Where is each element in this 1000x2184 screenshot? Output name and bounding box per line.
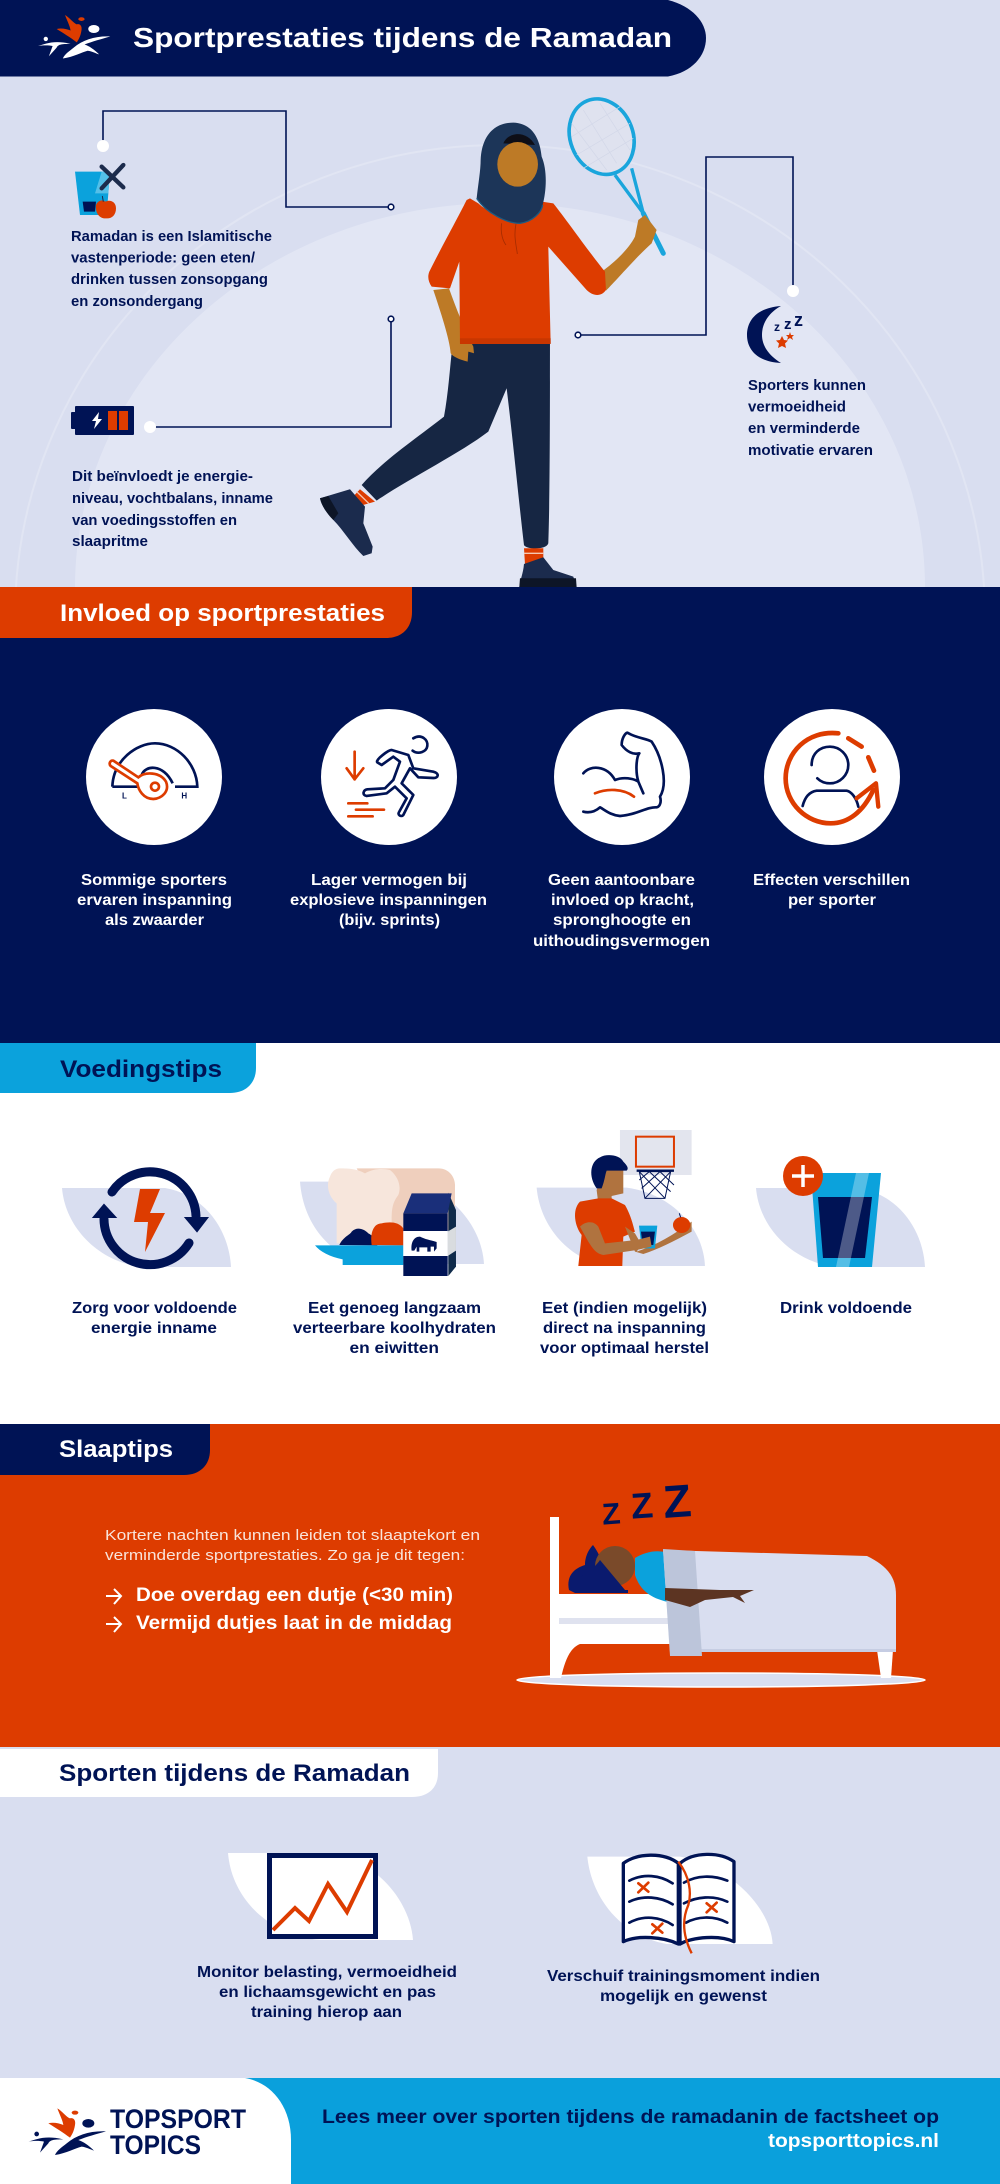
- hoodie: [428, 198, 606, 343]
- text: fatigue explanation: Sporters kunnen: [748, 378, 866, 394]
- icon: low battery: [71, 406, 134, 435]
- heading: main title: Sportprestaties tijdens de Ramadan: [133, 22, 672, 53]
- text: energy explanation: [72, 469, 273, 550]
- text: fatigue explanation: en verminderde: [748, 421, 860, 437]
- headscarf: [477, 123, 546, 223]
- connector: fatigue to figure: [575, 157, 799, 338]
- icon: sleeping letters: Z: [630, 1484, 654, 1527]
- face: [497, 142, 538, 187]
- text: energy explanation: niveau, vochtbalans, inname: [72, 491, 273, 507]
- text: sufficient energy: Zorg voor voldoende: [72, 1300, 237, 1317]
- icon: moon and sleep: z: [794, 310, 803, 330]
- text: no effect on strength: invloed op kracht,: [551, 892, 694, 909]
- list: sleep tips: Doe overdag een dutje (<30 min): [136, 1585, 453, 1606]
- heading tab: Voedingstips: Voedingstips: [60, 1056, 222, 1083]
- text: no effect on strength: Geen aantoonbare: [548, 872, 695, 889]
- icon: player with basketball hoop, drink and apple: [537, 1130, 705, 1266]
- icon: sleeping letters: Z: [661, 1474, 693, 1528]
- text: sufficient energy: [72, 1300, 237, 1337]
- text: energy explanation: Dit beïnvloedt je energie-: [72, 469, 253, 485]
- text: monitoring: [197, 1964, 457, 2021]
- text: shift training: mogelijk en gewenst: [600, 1988, 767, 2005]
- text: shift training: [547, 1968, 820, 2005]
- text: monitoring: training hierop aan: [251, 2004, 402, 2021]
- text: effort: Sommige sporters: [81, 872, 227, 889]
- text: varies per athlete: Effecten verschillen: [753, 872, 910, 889]
- icon: tennis racket: [558, 89, 663, 253]
- text: direct recovery: Eet (indien mogelijk): [542, 1300, 707, 1317]
- heading tab: Invloed op sportprestaties: Invloed op sportprestaties: [60, 600, 385, 627]
- text: ramadan explanation: Ramadan is een Islamitische: [71, 229, 272, 245]
- icon: sprinter with lower power: [321, 709, 457, 845]
- list: sleep tips: [106, 1585, 453, 1634]
- logo: Topsport Topics: [28, 2104, 246, 2160]
- heading tab: Slaaptips: Slaaptips: [59, 1436, 173, 1463]
- icon: glass, apple and cross: [75, 165, 123, 218]
- illustration: athlete with hijab and tennis racket: [320, 89, 663, 587]
- panel: hero introduction: [0, 0, 1000, 1089]
- icon: individual athlete cycle: [764, 709, 900, 845]
- heading tab: Voedingstips: [0, 1043, 256, 1093]
- title banner: [0, 0, 706, 76]
- text: effort: [77, 872, 232, 929]
- call to action: [322, 2107, 939, 2152]
- text: no effect on strength: spronghoogte en: [553, 912, 691, 929]
- text: varies per athlete: per sporter: [788, 892, 876, 909]
- text: sleep introduction: Kortere nachten kunnen leiden tot slaaptekort en: [105, 1527, 480, 1544]
- illustration: person sleeping in bed: [517, 1474, 925, 1687]
- heading tab: Slaaptips: [0, 1424, 210, 1475]
- icon: sleeping letters: Z: [601, 1497, 621, 1532]
- panel: sleep tips: [0, 1424, 1000, 1747]
- text: slow carbohydrates: en eiwitten: [350, 1340, 439, 1357]
- hanging forearm: [433, 288, 474, 362]
- icon: effort gauge: [86, 709, 222, 845]
- text: fatigue explanation: motivatie ervaren: [748, 443, 873, 459]
- panel: footer: [0, 2078, 1000, 2184]
- text: sprint power: Lager vermogen bij: [311, 872, 467, 889]
- raised forearm: [602, 215, 657, 291]
- text: ramadan explanation: en zonsondergang: [71, 294, 203, 310]
- text: sleep introduction: verminderde sportprestaties. Zo ga je dit tegen:: [105, 1547, 465, 1564]
- panel: sports during Ramadan: [0, 1747, 1000, 2079]
- logo: Topsport Topics: TOPSPORT: [110, 2104, 246, 2134]
- icon: effort gauge: L: [122, 792, 127, 801]
- text: fatigue explanation: [748, 378, 873, 459]
- text: direct recovery: voor optimaal herstel: [540, 1340, 709, 1357]
- text: slow carbohydrates: [293, 1300, 496, 1357]
- text: slow carbohydrates: verteerbare koolhydraten: [293, 1320, 496, 1337]
- icon: header logo: [38, 15, 110, 58]
- text: sprint power: explosieve inspanningen: [290, 892, 487, 909]
- heading tab: Sporten tijdens de Ramadan: [0, 1749, 438, 1797]
- text: sprint power: (bijv. sprints): [339, 912, 440, 929]
- text: sprint power: [290, 872, 487, 929]
- logo: Topsport Topics: TOPICS: [110, 2130, 201, 2160]
- text: sufficient energy: energie inname: [91, 1320, 217, 1337]
- heading tab: Invloed op sportprestaties: [0, 587, 412, 638]
- text: sleep introduction: [105, 1527, 480, 1564]
- icon: energy cycle: [62, 1172, 231, 1267]
- text: ramadan explanation: [71, 229, 272, 310]
- call to action: Lees meer over sporten tijdens de ramadanin de factsheet op: [322, 2107, 939, 2128]
- text: ramadan explanation: drinken tussen zonsopgang: [71, 272, 268, 288]
- text: shift training: Verschuif trainingsmoment indien: [547, 1968, 820, 1985]
- heading tab: Sporten tijdens de Ramadan: Sporten tijdens de Ramadan: [59, 1760, 410, 1787]
- text: direct recovery: [540, 1300, 709, 1357]
- text: no effect on strength: uithoudingsvermogen: [533, 933, 710, 950]
- text: fatigue explanation: vermoeidheid: [748, 400, 846, 416]
- icon: load monitoring chart: [228, 1853, 413, 1940]
- panel: nutrition tips: [0, 1043, 1000, 1424]
- icon: moon and sleep: z: [774, 320, 780, 334]
- text: drink enough: Drink voldoende: [780, 1300, 912, 1317]
- text: monitoring: en lichaamsgewicht en pas: [219, 1984, 436, 2001]
- text: direct recovery: direct na inspanning: [543, 1320, 706, 1337]
- icon: moon and sleep: [747, 306, 803, 363]
- panel: influence on performance: [0, 587, 1000, 1043]
- pants: [362, 343, 550, 549]
- icon: moon and sleep: z: [784, 316, 792, 333]
- text: slow carbohydrates: Eet genoeg langzaam: [308, 1300, 481, 1317]
- icon: effort gauge: H: [181, 792, 187, 801]
- text: effort: als zwaarder: [105, 912, 204, 929]
- connector: fasting to figure: [97, 111, 394, 210]
- list: sleep tips: Vermijd dutjes laat in de middag: [136, 1613, 452, 1634]
- text: energy explanation: van voedingsstoffen en: [72, 513, 237, 529]
- text: varies per athlete: [753, 872, 910, 909]
- icon: bread, plate and milk carton: [300, 1168, 484, 1276]
- icon: flexed muscle: [554, 709, 690, 845]
- text: energy explanation: slaapritme: [72, 534, 148, 550]
- text: no effect on strength: [533, 872, 710, 950]
- icon: sleeping letters: [601, 1474, 693, 1532]
- text: effort: ervaren inspanning: [77, 892, 232, 909]
- shoes and socks: [320, 489, 577, 587]
- text: monitoring: Monitor belasting, vermoeidheid: [197, 1964, 457, 1981]
- connector: energy to figure: [144, 316, 394, 433]
- call to action: topsporttopics.nl: [768, 2131, 939, 2152]
- icon: glass of water with plus: [756, 1156, 925, 1267]
- icon: open training schedule book: [587, 1854, 773, 1953]
- text: ramadan explanation: vastenperiode: geen eten/: [71, 250, 255, 266]
